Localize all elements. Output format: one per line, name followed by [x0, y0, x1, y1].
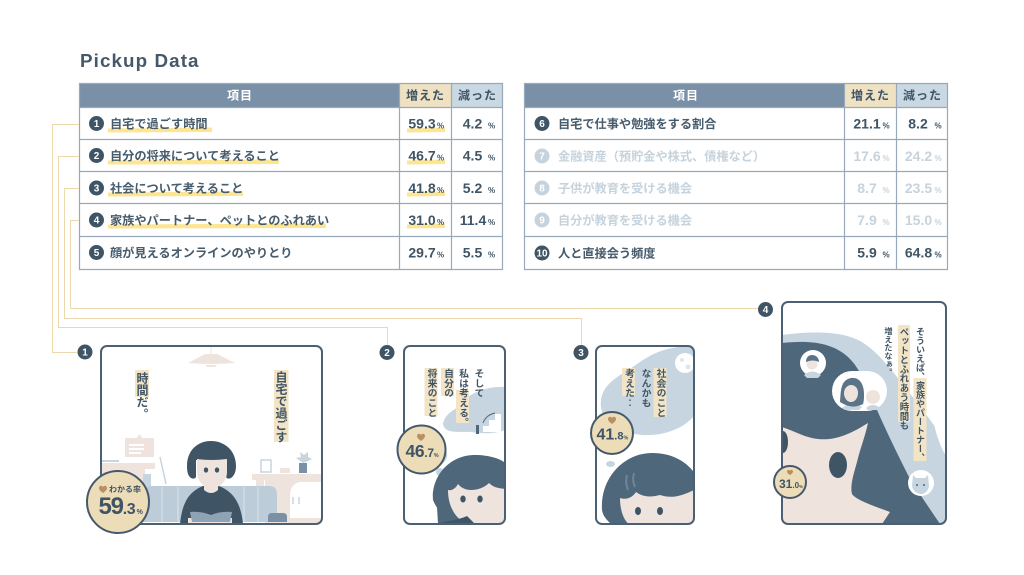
table rows: left: 自分の将来について考えること — [110, 148, 280, 163]
panel number 4: 4 — [763, 305, 769, 316]
table rows: left: % — [437, 122, 444, 130]
panel 3: thinking about society — [591, 346, 696, 525]
frame — [782, 302, 946, 524]
table rows: right: 24.2 — [905, 148, 932, 164]
vertical text: 考えた‥ — [623, 368, 635, 408]
table: left — [80, 84, 502, 270]
table header: right: 増えた — [851, 88, 890, 102]
title: Pickup Data — [80, 50, 200, 71]
table rows: left: 46.7 — [408, 148, 436, 164]
table rows: right: 子供が教育を受ける機会 — [558, 180, 692, 196]
connector lines — [52, 124, 758, 352]
table rows: right: % — [934, 218, 942, 227]
badge: 31.0% — [774, 466, 806, 498]
table rows: right: 5.9 — [857, 244, 877, 260]
table rows: right: 9 — [539, 216, 545, 226]
table rows: right: 64.8 — [905, 244, 932, 260]
table rows: left: 4 — [94, 216, 100, 226]
vertical text — [884, 325, 926, 462]
table rows: right: % — [882, 154, 890, 163]
table rows: left: 5 — [94, 248, 100, 259]
table rows: right: 6 — [539, 119, 545, 130]
badge: 41.8% — [591, 412, 633, 454]
table rows: left: 11.4 — [460, 212, 486, 228]
badge: 46.7%: 46.7% — [406, 441, 439, 461]
panel number 3 — [574, 345, 588, 360]
table header: right — [524, 84, 948, 108]
frame — [101, 346, 322, 524]
table rows: left: % — [437, 218, 444, 227]
table rows: right: % — [934, 250, 942, 260]
table rows: left: % — [437, 154, 444, 162]
vertical text: 自宅で過ごす — [274, 370, 288, 443]
table rows: right: 8.7 — [857, 180, 877, 196]
table rows: right: 金融資産（預貯金や株式、債権など） — [558, 148, 765, 164]
illustration: room and person reading — [101, 346, 322, 524]
table rows: right: 自分が教育を受ける機会 — [558, 212, 692, 228]
vertical text: 自分の — [442, 367, 454, 398]
panel number 3: 3 — [578, 348, 584, 359]
panel number 2 — [380, 345, 394, 360]
badge: 41.8%: 41.8% — [596, 426, 628, 444]
table header: left: 減った — [458, 88, 497, 102]
table rows: left: 5.5 — [463, 244, 482, 260]
frame — [404, 346, 505, 524]
table rows: left: 4.5 — [463, 148, 482, 164]
table rows: right: % — [882, 186, 890, 195]
badge: 46.7% — [398, 426, 446, 474]
table rows: left — [80, 84, 502, 270]
panel number 1 — [78, 344, 92, 360]
table rows: right: 8.2 — [908, 116, 928, 132]
vertical text: 私は考える。 — [457, 367, 469, 427]
table rows: left: 59.3 — [408, 116, 436, 132]
vertical text: そういえば、家族やパートナー、 — [915, 327, 925, 462]
table rows: left: 家族やパートナー、ペットとのふれあい — [110, 212, 329, 228]
badge: 31.0%: 31.0% — [779, 477, 803, 491]
table rows: right: 7.9 — [857, 212, 877, 228]
vertical text: 将来のこと — [426, 367, 437, 418]
illustration: girl and moon bubble — [601, 346, 696, 525]
table rows: right: 15.0 — [905, 212, 932, 228]
badge: 59.3%: 59.3% — [98, 493, 144, 520]
table rows: left: 4.2 — [463, 116, 482, 132]
panel 1: living room — [87, 346, 322, 533]
vertical text — [424, 367, 484, 427]
table rows: left: 1 — [94, 119, 100, 130]
table header: left: 増えた — [406, 88, 445, 102]
vertical text — [135, 370, 288, 443]
table rows: left: % — [488, 218, 495, 227]
vertical text: ペットとふれあう時間も — [898, 327, 910, 430]
table rows: left: % — [488, 250, 495, 260]
vertical text — [622, 367, 666, 418]
table rows: right: % — [934, 186, 942, 195]
badge: 59.3% — [87, 471, 149, 533]
table header: left — [80, 84, 502, 108]
panel number 4 — [758, 302, 773, 317]
table rows: left: % — [488, 122, 495, 130]
table rows: left: 顔が見えるオンラインのやりとり — [110, 245, 292, 260]
table header: left: 項目 — [227, 88, 253, 102]
table rows: left: 2 — [94, 151, 100, 162]
table: right — [524, 84, 948, 270]
table rows: right: % — [934, 122, 942, 130]
table rows: left: 社会について考えること — [110, 180, 243, 196]
table rows: right: 自宅で仕事や勉強をする割合 — [558, 116, 716, 131]
vertical text: 社会のこと — [654, 367, 666, 418]
table rows: left: % — [488, 154, 495, 162]
panel number 1: 1 — [82, 348, 88, 358]
vertical text: 時間だ。 — [135, 371, 149, 420]
frame — [596, 346, 694, 524]
table rows: left: 5.2 — [463, 180, 482, 196]
illustration: girl and thought bubble — [433, 387, 507, 525]
table rows: left: 41.8 — [408, 180, 436, 196]
table rows: left: % — [437, 250, 444, 260]
panel 2: thinking about the future — [398, 346, 507, 525]
table rows: right: % — [882, 218, 890, 227]
table rows: left: 自宅で過ごす時間 — [110, 116, 208, 131]
vertical text: なんかも — [640, 368, 651, 408]
badge: 59.3%: わかる率 — [109, 484, 141, 494]
table rows: right: 10 — [536, 248, 548, 260]
table rows: right: 17.6 — [853, 148, 881, 164]
vertical text: 増えたなぁ。 — [884, 326, 893, 376]
table rows: right: % — [934, 154, 942, 163]
table rows: right: 23.5 — [905, 180, 932, 196]
table rows: left: % — [437, 186, 444, 195]
table rows: right: % — [882, 250, 890, 260]
table rows: right: 人と直接会う頻度 — [558, 246, 656, 260]
table rows: left: 29.7 — [408, 244, 436, 260]
table rows: right: 8 — [539, 184, 545, 194]
table rows: right: % — [882, 122, 890, 130]
table header: right: 減った — [903, 88, 942, 102]
panel number 2: 2 — [384, 348, 390, 359]
vertical text: そして — [472, 368, 484, 398]
table rows: left: % — [488, 186, 495, 195]
table rows: right: 7 — [539, 152, 545, 162]
panel 4: family and pets — [774, 302, 946, 524]
table rows: right: 21.1 — [853, 116, 881, 132]
illustration: large head with bubbles — [778, 333, 946, 524]
table rows: left: 3 — [94, 184, 100, 194]
table rows: left: 31.0 — [408, 212, 436, 228]
table rows: right — [524, 84, 948, 270]
table header: right: 項目 — [673, 88, 699, 102]
